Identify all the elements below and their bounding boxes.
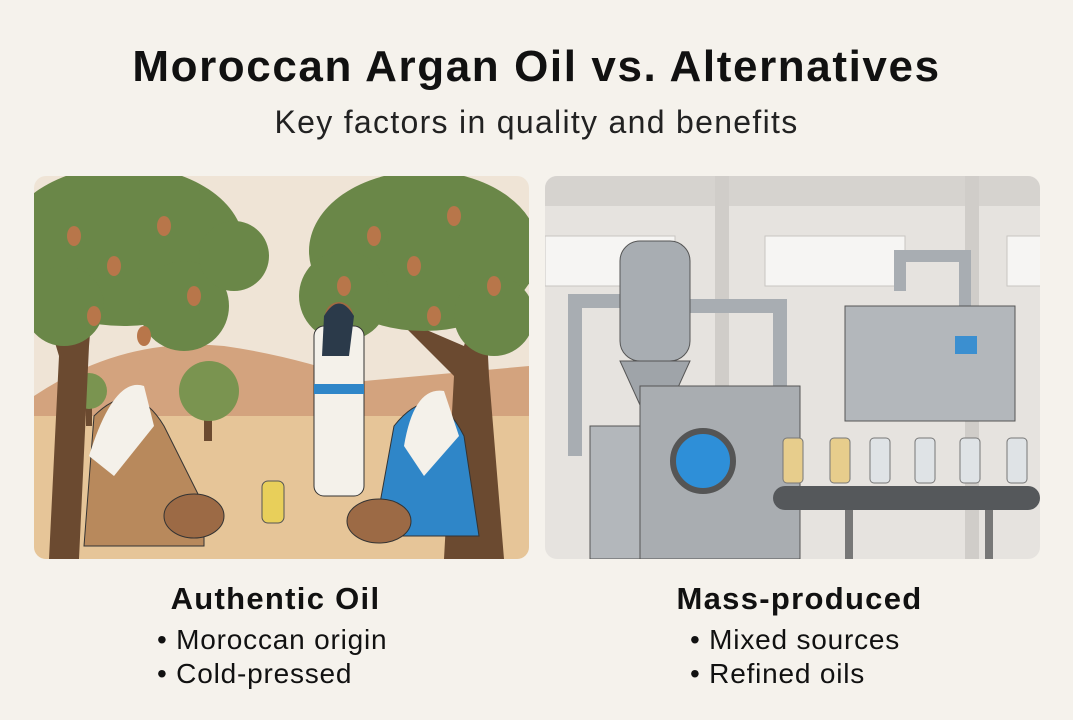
small trees (86, 396, 92, 426)
heading: authentic: Authentic Oil (171, 581, 380, 616)
tall tank (620, 241, 690, 361)
title: Moroccan Argan Oil vs. Alternatives (132, 42, 941, 91)
bullets: authentic (157, 624, 387, 689)
right woman (374, 403, 479, 536)
left woman (84, 398, 204, 546)
panel: factory illustration (545, 176, 1040, 559)
bullets: mass-produced: • Mixed sources (690, 624, 900, 655)
bottles (783, 438, 1027, 483)
left tree (44, 286, 94, 559)
panel: authentic illustration (34, 176, 529, 559)
right machine (845, 306, 1015, 421)
right tree (394, 276, 504, 559)
conveyor (773, 486, 1040, 510)
pipes (575, 301, 640, 456)
bullets: mass-produced: • Refined oils (690, 658, 865, 689)
bullets: mass-produced (690, 624, 900, 689)
heading: mass-produced: Mass-produced (676, 581, 922, 616)
bullets: authentic: • Cold-pressed (157, 658, 352, 689)
standing woman (314, 326, 364, 496)
subtitle: Key factors in quality and benefits (274, 104, 798, 140)
big machine (640, 386, 800, 559)
bullets: authentic: • Moroccan origin (157, 624, 387, 655)
